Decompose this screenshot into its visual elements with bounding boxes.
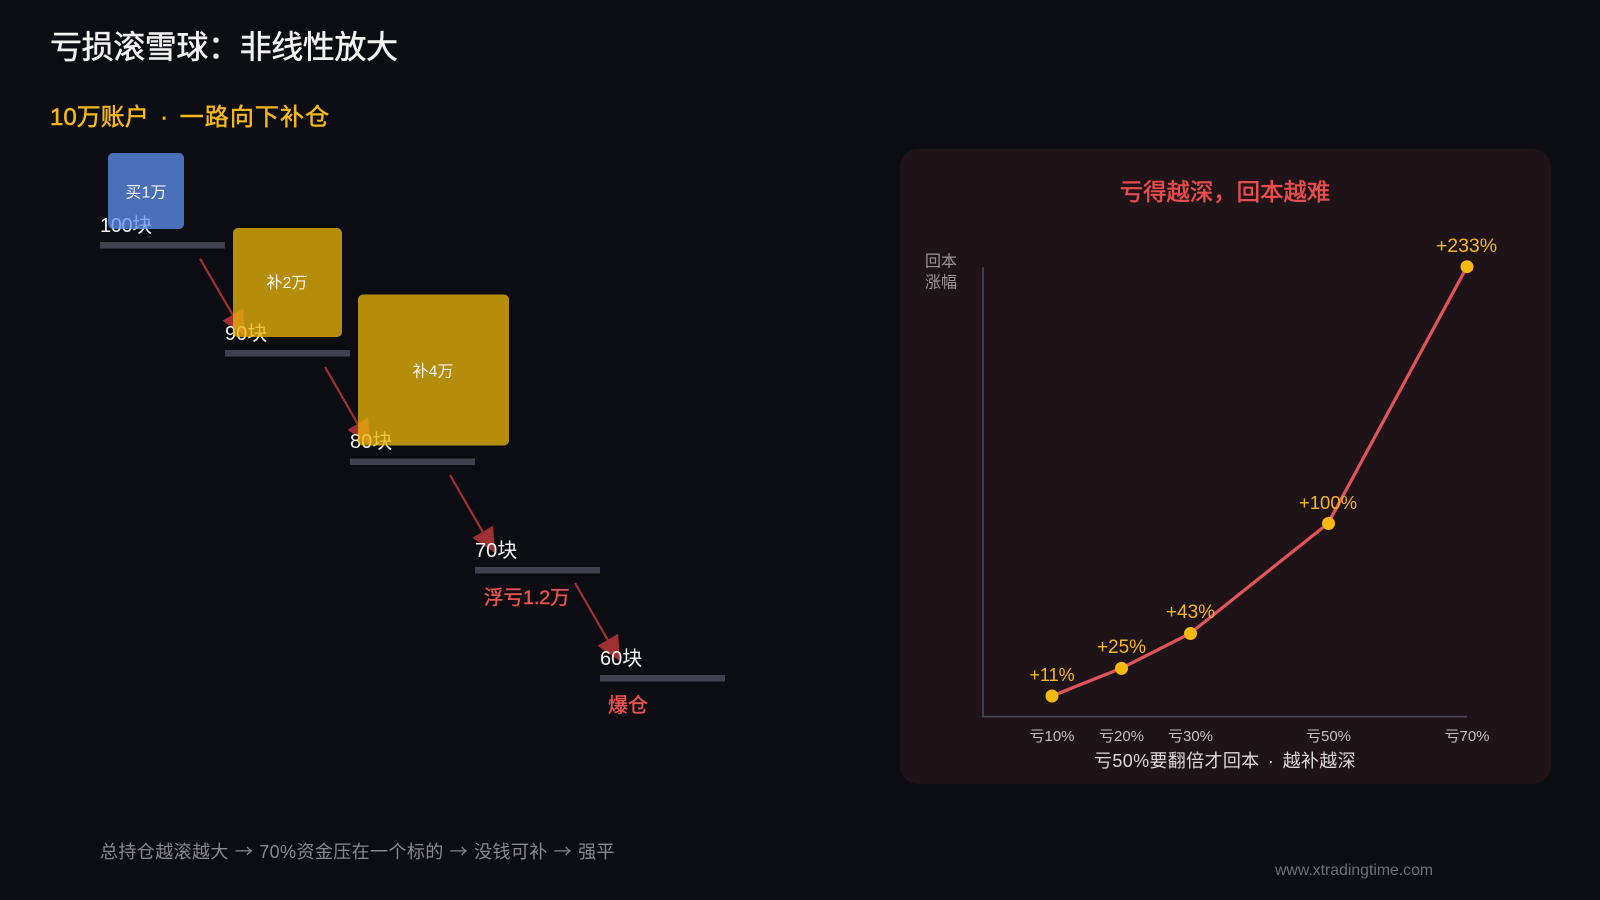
position box: buy 10k [108, 153, 184, 229]
x axis labels: 亏50% [1306, 728, 1351, 745]
box labels: 补4万 [413, 362, 453, 380]
price level bars [100, 242, 725, 682]
arrow: 80 to 70 [450, 475, 495, 553]
subtitle: 10万账户 · 一路向下补仓 [50, 104, 330, 131]
chart heading: 亏得越深，回本越难 [1120, 179, 1330, 205]
website: www.xtradingtime.com [1274, 862, 1433, 879]
liquidation label: 爆仓 [608, 694, 648, 717]
position box: add 20k [233, 228, 342, 337]
y axis title: 回本 [925, 252, 957, 270]
title: 亏损滚雪球：非线性放大 [50, 29, 398, 65]
y axis title: 涨幅 [925, 274, 957, 292]
arrows between price levels [200, 259, 620, 661]
box labels [126, 184, 453, 380]
arrow: 100 to 90 [200, 259, 245, 336]
footer summary: 总持仓越滚越大 → 70%资金压在一个标的 → 没钱可补 → 强平 [100, 838, 615, 864]
chart axes [983, 267, 1467, 717]
data labels: +11% [1029, 665, 1075, 685]
position box: add 40k [358, 294, 509, 446]
floating loss label: 浮亏1.2万 [484, 587, 570, 609]
box labels: 买1万 [126, 184, 166, 202]
price labels: 90块 [225, 322, 267, 345]
data labels: +43% [1166, 602, 1215, 623]
panel background [900, 149, 1551, 784]
price labels: 100块 [100, 214, 152, 237]
data labels: +233% [1436, 235, 1497, 257]
chart caption: 亏50%要翻倍才回本 · 越补越深 [1094, 751, 1356, 771]
arrow: 90 to 80 [325, 367, 370, 445]
x axis labels: 亏10% [1029, 728, 1075, 745]
y axis title [925, 252, 957, 292]
price labels: 70块 [475, 539, 517, 562]
data points [1046, 260, 1474, 702]
x axis labels [1029, 728, 1490, 745]
panel: recovery curve [900, 149, 1551, 784]
data labels: +100% [1299, 492, 1357, 513]
arrow: 70 to 60 [575, 583, 620, 661]
data labels [1029, 235, 1497, 685]
price labels: 60块 [600, 647, 642, 670]
price labels [100, 214, 642, 670]
recovery line [1052, 267, 1467, 696]
price labels: 80块 [350, 430, 392, 453]
panel: staircase averaging-down diagram [100, 153, 725, 717]
data labels: +25% [1097, 637, 1146, 658]
x axis labels: 亏30% [1168, 728, 1213, 745]
box labels: 补2万 [267, 274, 307, 292]
x axis labels: 亏20% [1099, 728, 1144, 745]
x axis labels: 亏70% [1444, 728, 1490, 745]
